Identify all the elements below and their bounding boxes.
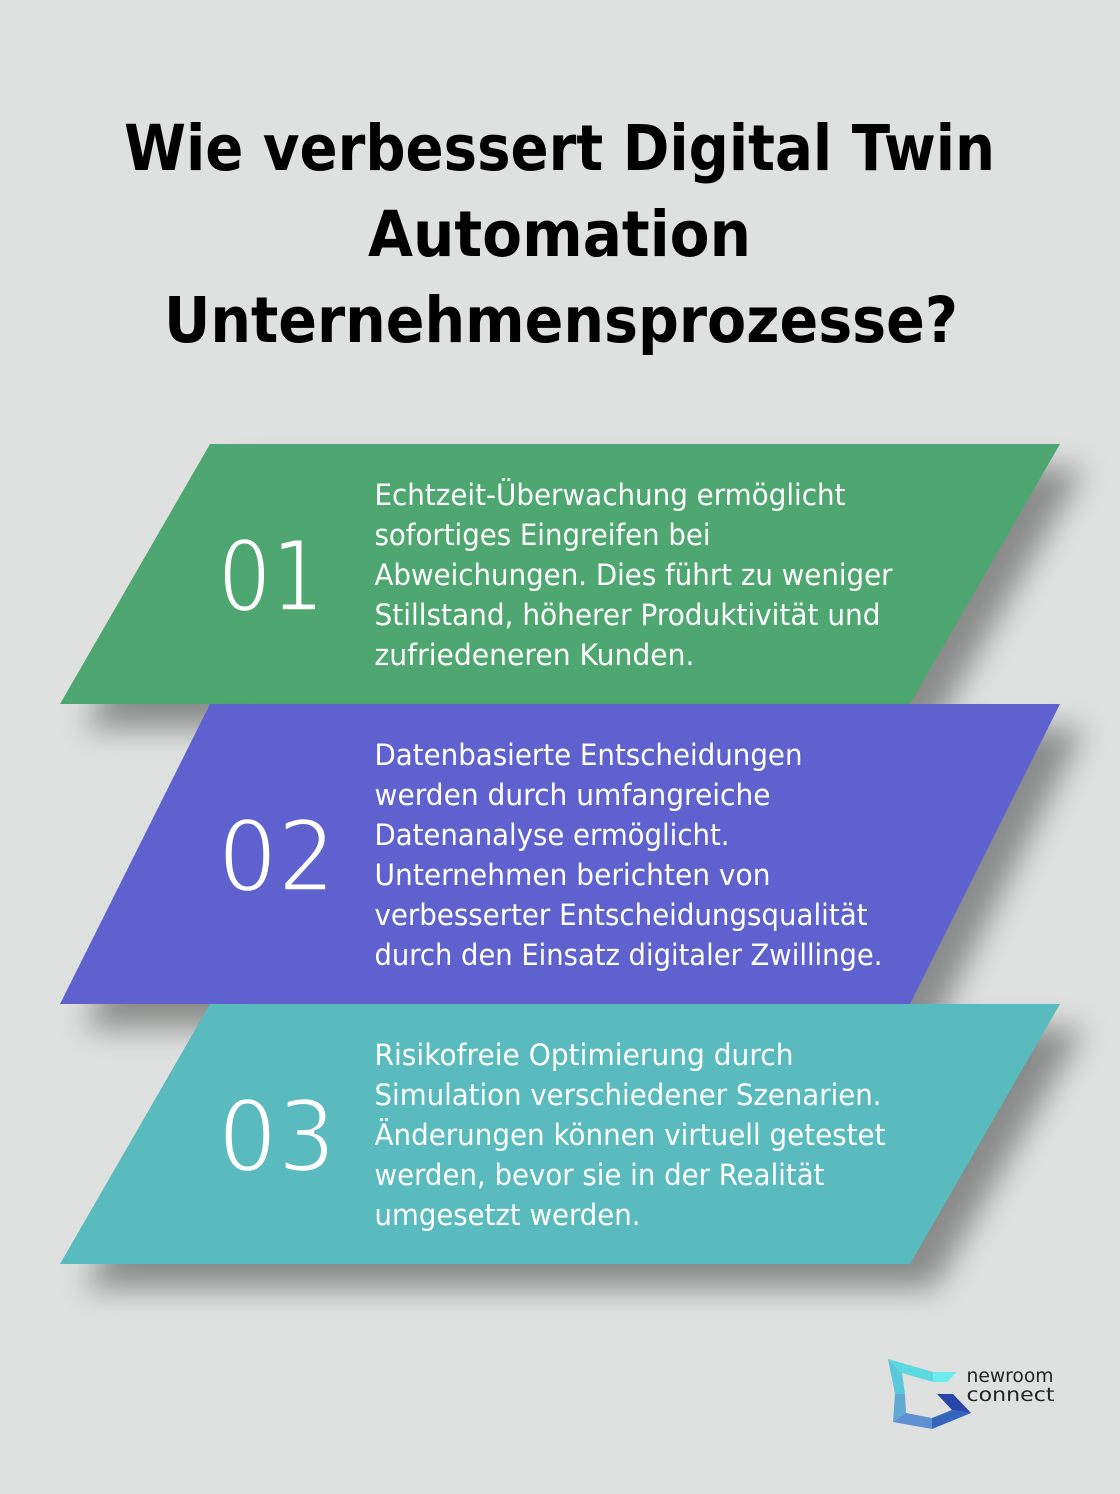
text block 03: Änderungen können virtuell getestet — [374, 1118, 886, 1152]
title: Wie verbessert Digital Twin — [124, 111, 995, 185]
number 02: 02 — [218, 800, 336, 915]
text block 02: Datenbasierte Entscheidungen — [374, 738, 802, 772]
text block 03: umgesetzt werden. — [374, 1198, 640, 1232]
logo wordmark: connect — [966, 1384, 1054, 1406]
number 01: 01 — [218, 520, 324, 635]
title — [124, 111, 995, 357]
logo wordmark — [966, 1365, 1054, 1406]
panel: step 01 — [60, 444, 1084, 728]
text block 01: zufriedeneren Kunden. — [374, 638, 694, 672]
text block 03: Risikofreie Optimierung durch — [374, 1038, 794, 1072]
text block 02: durch den Einsatz digitaler Zwillinge. — [374, 938, 882, 972]
text block 02: Datenanalyse ermöglicht. — [374, 818, 730, 852]
logo wordmark: newroom — [966, 1365, 1054, 1387]
text block 02 — [374, 738, 882, 972]
text block 02: Unternehmen berichten von — [374, 858, 770, 892]
title: Unternehmensprozesse? — [164, 283, 958, 357]
text block 03 — [374, 1038, 886, 1232]
icon: logo mark — [888, 1359, 971, 1429]
number 03: 03 — [218, 1080, 336, 1195]
text block 02: werden durch umfangreiche — [374, 778, 770, 812]
text block 01 — [374, 478, 893, 672]
text block 01: sofortiges Eingreifen bei — [374, 518, 710, 552]
logo: newroom connect — [888, 1359, 1054, 1429]
text block 01: Stillstand, höherer Produktivität und — [374, 598, 880, 632]
text block 01: Abweichungen. Dies führt zu weniger — [374, 558, 893, 592]
text block 02: verbesserter Entscheidungsqualität — [374, 898, 868, 932]
panel: step 03 — [60, 1004, 1084, 1288]
title: Automation — [368, 197, 751, 271]
text block 03: Simulation verschiedener Szenarien. — [374, 1078, 882, 1112]
panel: step 02 — [60, 704, 1084, 1028]
text block 03: werden, bevor sie in der Realität — [374, 1158, 824, 1192]
text block 01: Echtzeit-Überwachung ermöglicht — [374, 478, 846, 512]
